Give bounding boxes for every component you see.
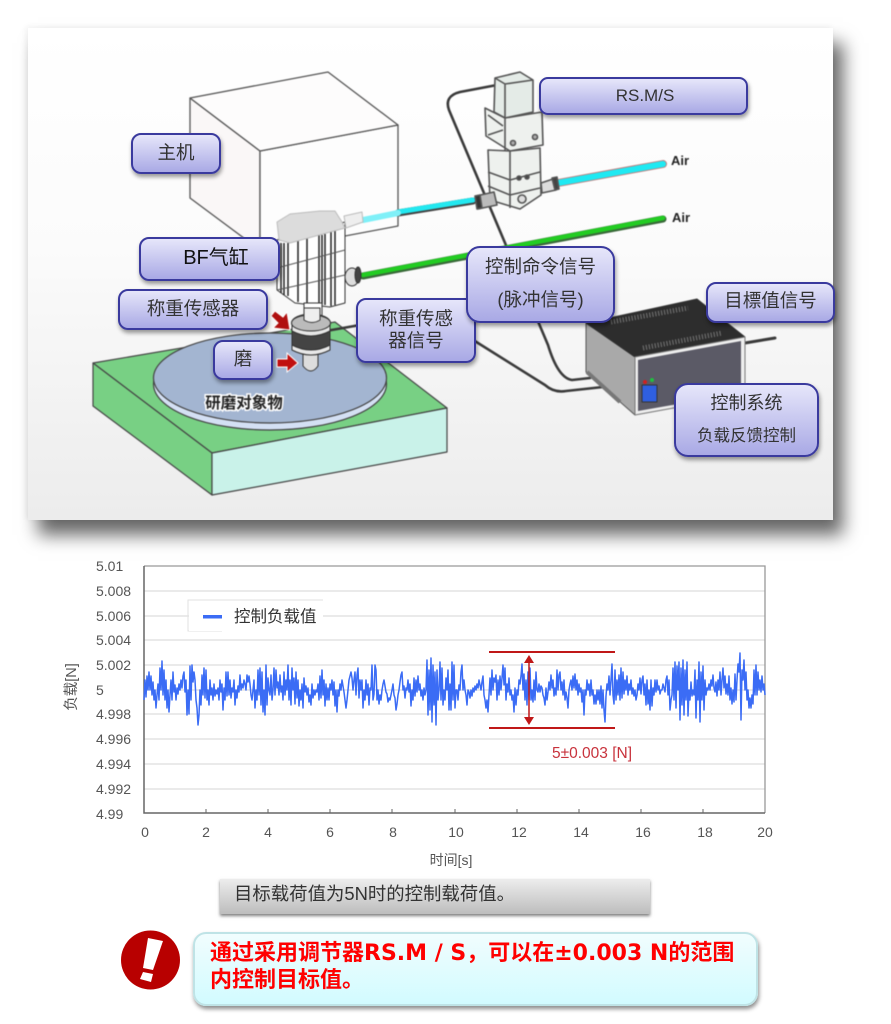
y axis tick labels: 4.992 xyxy=(96,781,131,797)
callout: conclusion: 内控制目标值。 xyxy=(210,968,364,993)
polishing target disk xyxy=(154,333,386,430)
range marker: 5±0.003 N xyxy=(489,652,615,728)
caption bar xyxy=(220,879,650,914)
x axis tick labels xyxy=(141,824,773,840)
label: control system: 负载反馈控制 xyxy=(697,427,796,445)
label: polishing xyxy=(213,340,273,380)
y axis tick labels: 4.994 xyxy=(96,756,131,772)
y axis tick labels: 4.996 xyxy=(96,731,131,747)
RS.M/S regulator xyxy=(475,72,559,209)
green base block xyxy=(93,322,447,495)
label: RS.M/S xyxy=(539,77,748,115)
callout: conclusion: 通过采用调节器RS.M / S，可以在±0.003 N的范围 xyxy=(210,941,734,966)
polishing target label: 研磨对象物 xyxy=(205,393,283,412)
label: load cell signal: 称重传感 xyxy=(379,308,453,329)
label: BF cylinder: BF气缸 xyxy=(183,247,249,269)
label: control command signal xyxy=(466,246,615,323)
x axis tick labels: 2 xyxy=(202,824,210,840)
cable: load signal xyxy=(326,85,775,391)
y axis title: 负载[N] xyxy=(63,663,80,711)
label: load cell xyxy=(118,289,268,330)
x axis tick labels: 4 xyxy=(264,824,272,840)
range label: 5±0.003 [N] xyxy=(552,745,632,762)
x axis tick labels: 14 xyxy=(573,824,589,840)
y axis tick labels: 5.01 xyxy=(96,558,123,574)
label: load cell signal xyxy=(356,298,476,363)
x axis tick labels: 6 xyxy=(326,824,334,840)
red arrow: load cell xyxy=(271,311,290,330)
label: main unit xyxy=(131,133,221,174)
data line: control load xyxy=(144,653,765,725)
controller box xyxy=(586,299,745,415)
label: target value signal xyxy=(706,282,835,323)
x axis title: 时间[s] xyxy=(430,852,472,868)
label: load cell: 称重传感器 xyxy=(147,298,239,319)
y axis tick labels: 4.998 xyxy=(96,706,131,722)
x axis tick labels: 16 xyxy=(635,824,651,840)
x axis tick labels: 18 xyxy=(697,824,713,840)
red arrow: polishing tip xyxy=(277,353,298,372)
x axis tick labels: 12 xyxy=(511,824,527,840)
x axis tick labels: 10 xyxy=(448,824,464,840)
y axis tick labels: 5.006 xyxy=(96,608,131,624)
y axis tick labels xyxy=(96,558,131,822)
plot frame xyxy=(144,566,765,813)
legend: 控制负载值 xyxy=(234,607,316,626)
label: control system xyxy=(674,383,819,457)
y axis tick labels: 5.004 xyxy=(96,632,131,648)
label: polishing: 磨 xyxy=(234,348,252,369)
label: control system: 控制系统 xyxy=(710,393,782,413)
label: control command signal: 控制命令信号 xyxy=(485,256,596,277)
main unit cube xyxy=(190,72,398,252)
y axis tick labels: 5.008 xyxy=(96,583,131,599)
x axis tick labels: 0 xyxy=(141,824,149,840)
cyan air pipe xyxy=(363,164,663,220)
callout: conclusion xyxy=(193,932,758,1006)
label: control command signal: (脉冲信号) xyxy=(497,289,584,310)
x axis tick labels: 8 xyxy=(389,824,397,840)
air labels xyxy=(671,153,690,225)
label: target value signal: 目標值信号 xyxy=(724,290,817,311)
x axis tick labels: 20 xyxy=(757,824,773,840)
y axis tick labels: 4.99 xyxy=(96,806,123,822)
label: load cell signal: 器信号 xyxy=(388,330,444,351)
caption bar: 目标载荷值为5N时的控制载荷值。 xyxy=(234,883,515,904)
y axis tick labels: 5.002 xyxy=(96,657,131,673)
legend xyxy=(188,600,323,631)
BF cylinder xyxy=(277,211,363,319)
grid lines xyxy=(144,591,765,789)
label: main unit: 主机 xyxy=(157,142,194,163)
load cell and polishing tip xyxy=(292,308,330,371)
icon: warning exclamation xyxy=(121,930,180,990)
air labels: Air xyxy=(671,153,689,168)
y axis tick labels: 5 xyxy=(96,682,104,698)
label: RS.M/S: RS.M/S xyxy=(616,86,674,105)
green air pipe xyxy=(363,218,663,276)
label: BF cylinder xyxy=(139,237,280,281)
panel: system diagram background xyxy=(28,28,833,520)
air labels: Air xyxy=(672,210,690,225)
